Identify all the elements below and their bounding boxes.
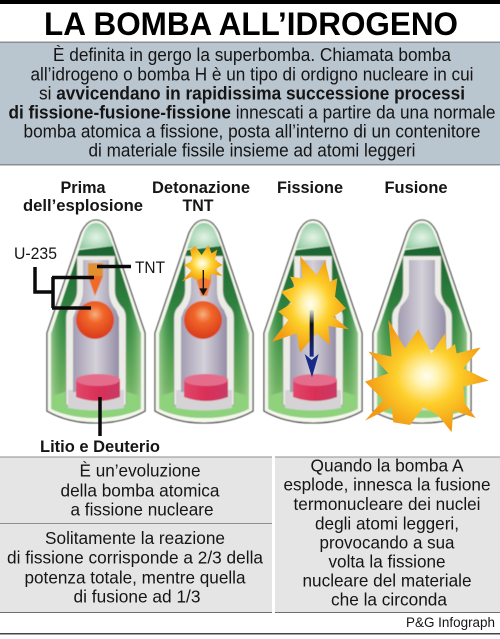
panel: fusion explanation: termonucleare dei nuclei (294, 494, 480, 514)
TNT charge (88, 263, 103, 276)
column headings: Detonazione (152, 179, 250, 197)
intro text: di materiale fissile insieme ad atomi leggeri (88, 140, 416, 161)
intro text: È definita in gergo la superbomba. Chiamata bomba (53, 44, 452, 65)
U-235 sphere (76, 301, 114, 339)
panel: fission and fusion power: di fissione corrisponde a 2/3 della (7, 547, 263, 567)
TNT label with leader line (97, 259, 165, 277)
bomb 3: fission (264, 220, 362, 423)
column headings: Fissione (277, 179, 343, 197)
panel: introduction (0, 42, 500, 166)
column headings (23, 179, 448, 215)
top black bar (0, 0, 500, 4)
icon: TNT explosion star (182, 245, 223, 295)
panel: fusion explanation: provocando a sua (320, 532, 455, 552)
panel: atomic bomb evolution (0, 456, 272, 523)
panel: fusion explanation: Quando la bomba A (310, 456, 464, 476)
bomb 2: TNT detonation (155, 220, 253, 423)
column headings: Prima (60, 179, 106, 197)
intro text: all’idrogeno o bomba H è un tipo di ordigno nucleare in cui (30, 63, 474, 84)
panel: atomic bomb evolution: a fissione nucleare (70, 500, 214, 520)
column headings: TNT (182, 197, 214, 215)
column headings: Fusione (384, 179, 448, 197)
Litio e Deuterio label with leader line: Litio e Deuterio (40, 438, 160, 456)
panel: fusion explanation (275, 456, 500, 613)
bomb 4: fusion (373, 220, 471, 423)
panel: fission and fusion power: potenza totale, mentre quella (24, 567, 246, 587)
Litio e Deuterio label with leader line (40, 397, 160, 456)
title: LA BOMBA ALL’IDROGENO (44, 6, 458, 42)
bottom rule (0, 633, 500, 634)
column headings: dell’esplosione (23, 197, 143, 215)
panel: atomic bomb evolution: È un’evoluzione (80, 461, 200, 481)
panel: fusion explanation: esplode, innesca la fusione (284, 475, 490, 495)
panel: fusion explanation: degli atomi leggeri, (315, 513, 459, 533)
U-235 label with leader lines (14, 245, 94, 308)
U-235 label with leader lines: U-235 (14, 245, 57, 263)
bomb 1: before the explosion (47, 220, 145, 423)
panel: fission and fusion power: Solitamente la reazione (45, 528, 225, 548)
intro text: si avvicendano in rapidissima successione processi (39, 82, 465, 103)
panel: fission and fusion power (0, 523, 272, 613)
credit: P&G Infograph (406, 615, 495, 630)
panel: fusion explanation: volta la fissione (328, 552, 446, 572)
panel: fusion explanation: nucleare del materiale (302, 571, 472, 591)
panel: fusion explanation: che la circonda (331, 590, 447, 610)
panel: fission and fusion power: di fusione ad 1/3 (74, 586, 200, 606)
icon: fusion explosion star (365, 320, 489, 432)
TNT label with leader line: TNT (135, 259, 165, 277)
intro text (8, 44, 496, 161)
icon: fission explosion star and arrow (272, 256, 349, 377)
panel: atomic bomb evolution: della bomba atomica (60, 481, 220, 501)
